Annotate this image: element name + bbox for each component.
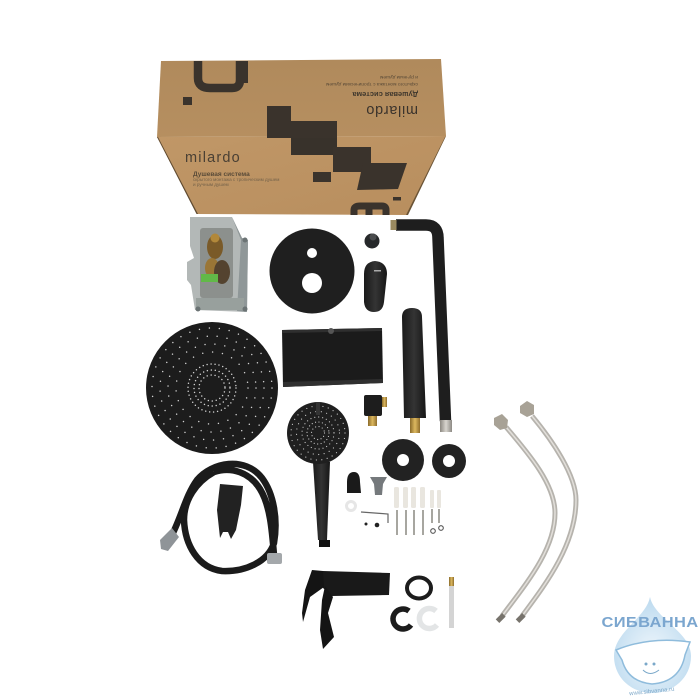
box checker pattern: [267, 106, 407, 190]
website: www.sibvanna.ru: [628, 687, 675, 697]
product title on front: Душевая система: [193, 171, 250, 178]
product description upside down: [325, 74, 418, 86]
braided hose two: [516, 401, 576, 623]
angled wall connector: [364, 395, 387, 426]
box top panel: [157, 59, 446, 137]
wall plugs: [394, 487, 441, 508]
product description upside down: и ручным душем: [379, 74, 418, 79]
box right edge shadow: [406, 136, 446, 215]
product description on front: и ручным душем: [193, 182, 229, 187]
brand name upside down: milardo: [366, 102, 418, 118]
bathtub face: [643, 663, 659, 674]
screws and rings: [397, 509, 443, 535]
allen key: [361, 512, 388, 523]
product title upside down: Душевая система: [352, 90, 418, 99]
white horseshoe washer: [419, 609, 437, 629]
cartridge cap: [364, 234, 380, 248]
small flange: [432, 444, 466, 478]
product description upside down: скрытого монтажа с тропическим душем: [325, 81, 418, 86]
small screw dot two: [375, 523, 379, 527]
small fittings: [346, 472, 388, 527]
bathtub: [616, 640, 690, 684]
box logo upside down: [183, 61, 248, 105]
black ball joint: [347, 472, 361, 493]
black rectangular wall box: [282, 328, 383, 387]
box left edge shadow: [157, 137, 198, 214]
concealed valve box: [187, 217, 248, 312]
product description on front: скрытого монтажа с тропическим душем: [193, 177, 279, 182]
hose wall holder: [217, 484, 243, 539]
basin mixer tap: [302, 570, 390, 649]
cardboard box: [157, 59, 446, 215]
hand shower: [287, 402, 349, 547]
brand name on front: milardo: [185, 150, 241, 166]
large flange: [382, 439, 424, 481]
box logo on front: [354, 197, 401, 215]
sibvanna watermark logo: [602, 597, 699, 697]
brand name: СИБВАННА: [602, 615, 699, 631]
black horseshoe washer: [393, 609, 411, 629]
black rubber ring: [407, 578, 431, 598]
product description on front: [193, 177, 279, 187]
white washer: [346, 502, 356, 510]
box front panel: [157, 136, 446, 215]
threaded rod: [449, 577, 454, 628]
braided hose one: [494, 414, 555, 623]
flexible shower hose: [160, 464, 282, 571]
round wall plate with two holes: [270, 228, 354, 314]
water drop: [614, 597, 691, 693]
small screw dot one: [364, 522, 368, 526]
mixer lever handle: [364, 261, 387, 312]
curved shower arm: [390, 220, 452, 432]
grey aerator key: [370, 477, 387, 495]
shower riser tube: [402, 308, 426, 433]
rain shower head: [146, 322, 278, 454]
